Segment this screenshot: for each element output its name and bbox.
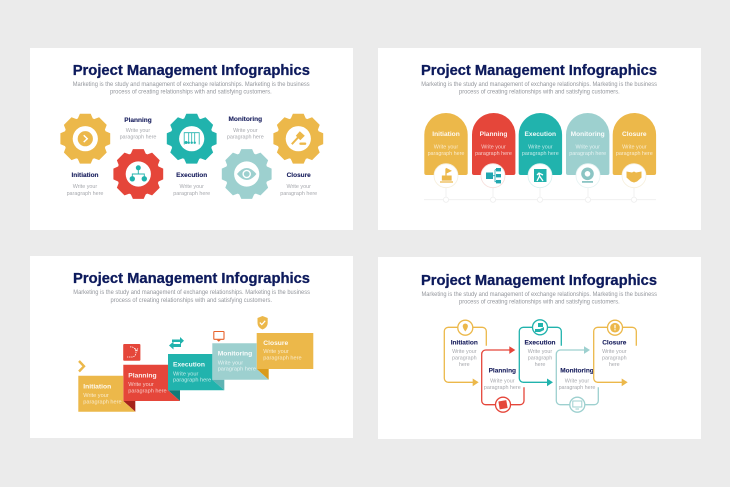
flow: monitoring: Monitoring bbox=[560, 368, 594, 375]
label: initiation: Initiation bbox=[71, 172, 99, 179]
flow: monitoring: Write your bbox=[565, 379, 589, 385]
icon: monitor bbox=[214, 332, 224, 342]
label: initiation bbox=[67, 172, 103, 197]
label: initiation: paragraph here bbox=[67, 191, 103, 197]
card: planning: Planning bbox=[480, 131, 507, 138]
ribbon: initiation bbox=[78, 376, 135, 412]
flow: planning: paragraph here bbox=[484, 385, 521, 391]
label: planning: Write your bbox=[126, 128, 150, 134]
card: closure: paragraph here bbox=[616, 151, 653, 157]
panel: gears bbox=[30, 48, 353, 230]
card: execution: paragraph here bbox=[522, 151, 559, 157]
ribbon: initiation: paragraph here bbox=[83, 399, 122, 405]
subtitle line 2: process of creating relationships with and satisfying customers. bbox=[110, 90, 272, 96]
subtitle line 2: process of creating relationships with and satisfying customers. bbox=[459, 299, 620, 305]
subtitle line 2: process of creating relationships with and satisfying customers. bbox=[110, 298, 272, 304]
timeline bbox=[424, 186, 656, 202]
flow: execution: paragraph bbox=[528, 356, 552, 362]
title: Project Management Infographics bbox=[421, 62, 657, 79]
label: execution: Execution bbox=[176, 172, 207, 179]
ribbon: closure: Write your bbox=[263, 349, 289, 355]
gear: initiation bbox=[60, 114, 110, 164]
ribbon: monitoring: paragraph here bbox=[218, 367, 256, 373]
label: closure: Closure bbox=[287, 172, 311, 179]
flow: execution: here bbox=[535, 362, 545, 368]
ribbon: closure bbox=[257, 333, 313, 369]
title: Project Management Infographics bbox=[73, 270, 310, 287]
label: execution bbox=[173, 172, 210, 197]
panel: arches bbox=[378, 48, 701, 230]
flow: initiation: here bbox=[459, 362, 470, 368]
flow: closure: Write your bbox=[602, 349, 627, 355]
ribbon: execution: Execution bbox=[173, 362, 205, 369]
label: monitoring: Write your bbox=[233, 128, 258, 134]
ribbon: closure: Closure bbox=[263, 340, 288, 347]
flow: closure: here bbox=[609, 362, 620, 368]
ribbon: execution bbox=[168, 354, 224, 390]
label: execution: Write your bbox=[179, 184, 204, 190]
flow: monitoring: paragraph here bbox=[559, 385, 595, 391]
ribbon: monitoring: Write your bbox=[218, 360, 243, 366]
label: closure bbox=[280, 172, 317, 197]
icon: exchange arrows bbox=[169, 337, 184, 350]
gear: execution bbox=[167, 114, 217, 164]
flow: execution: Execution bbox=[524, 340, 556, 347]
icon: shield bbox=[258, 316, 268, 330]
card: monitoring: paragraph here bbox=[569, 151, 606, 157]
card: closure: Write your bbox=[622, 145, 647, 151]
subtitle line 2: process of creating relationships with and satisfying customers. bbox=[459, 90, 620, 96]
card: initiation: paragraph here bbox=[428, 151, 464, 157]
card: closure: Closure bbox=[622, 131, 647, 138]
ribbon: planning: Write your bbox=[128, 382, 154, 388]
flow: closure: Closure bbox=[602, 339, 627, 346]
flow: monitoring bbox=[556, 346, 598, 412]
ribbon: closure: paragraph here bbox=[263, 356, 302, 362]
card: planning: Write your bbox=[481, 145, 506, 151]
panel: staircase ribbons bbox=[30, 256, 353, 438]
subtitle: Marketing is the study and management of exchange relationships. Marketing is the business bbox=[422, 292, 657, 298]
flow: closure bbox=[594, 320, 636, 386]
label: monitoring: paragraph here bbox=[227, 135, 264, 141]
flow: execution bbox=[519, 320, 561, 386]
flow: initiation: Initiation bbox=[451, 339, 478, 346]
ribbon: execution: paragraph here bbox=[173, 378, 211, 384]
label: planning bbox=[120, 117, 156, 141]
flow: initiation bbox=[444, 320, 486, 386]
ribbon: initiation: Write your bbox=[83, 393, 109, 399]
ribbon: monitoring: Monitoring bbox=[218, 351, 252, 358]
panel: flow arrows bbox=[378, 257, 701, 439]
card: closure bbox=[613, 113, 656, 188]
gear: planning bbox=[113, 149, 163, 199]
card: initiation: Write your bbox=[434, 145, 458, 151]
gear: closure bbox=[273, 114, 323, 164]
label: closure: paragraph here bbox=[280, 191, 317, 197]
title: Project Management Infographics bbox=[421, 272, 657, 289]
subtitle: Marketing is the study and management of exchange relationships. Marketing is the business bbox=[421, 82, 657, 88]
card: execution: Execution bbox=[525, 131, 556, 138]
icon: map bbox=[123, 344, 140, 361]
card: initiation: Initiation bbox=[432, 131, 460, 138]
ribbon: planning: paragraph here bbox=[128, 388, 167, 394]
card: initiation bbox=[424, 113, 468, 188]
card: planning: paragraph here bbox=[475, 151, 512, 157]
label: initiation: Write your bbox=[73, 184, 97, 190]
card: execution bbox=[519, 113, 562, 188]
card: monitoring: Write your bbox=[575, 145, 600, 151]
label: planning: Planning bbox=[124, 117, 152, 124]
label: execution: paragraph here bbox=[173, 191, 210, 197]
flow: initiation: paragraph bbox=[452, 356, 477, 362]
label: planning: paragraph here bbox=[120, 135, 156, 141]
flow: planning: Write your bbox=[490, 379, 515, 385]
flow: execution: Write your bbox=[528, 349, 552, 355]
ribbon: execution: Write your bbox=[173, 371, 199, 377]
card: planning bbox=[472, 113, 515, 188]
icon: chevron bbox=[79, 361, 84, 372]
card: monitoring: Monitoring bbox=[571, 131, 605, 138]
ribbon: initiation: Initiation bbox=[83, 383, 111, 390]
card: monitoring bbox=[566, 113, 609, 188]
label: monitoring bbox=[227, 116, 264, 141]
subtitle: Marketing is the study and management of exchange relationships. Marketing is the business bbox=[73, 290, 310, 296]
flow: planning: Planning bbox=[489, 368, 516, 375]
flow: planning bbox=[482, 346, 524, 412]
subtitle: Marketing is the study and management of exchange relationships. Marketing is the business bbox=[73, 82, 310, 88]
card: execution: Write your bbox=[528, 145, 553, 151]
ribbon: planning bbox=[123, 365, 180, 401]
ribbon: planning: Planning bbox=[128, 373, 157, 380]
label: closure: Write your bbox=[286, 184, 311, 190]
gear: monitoring bbox=[222, 149, 272, 199]
title: Project Management Infographics bbox=[73, 62, 310, 79]
ribbon: monitoring bbox=[212, 343, 269, 380]
label: monitoring: Monitoring bbox=[229, 116, 262, 123]
flow: initiation: Write your bbox=[452, 349, 477, 355]
flow: closure: paragraph bbox=[602, 356, 627, 362]
